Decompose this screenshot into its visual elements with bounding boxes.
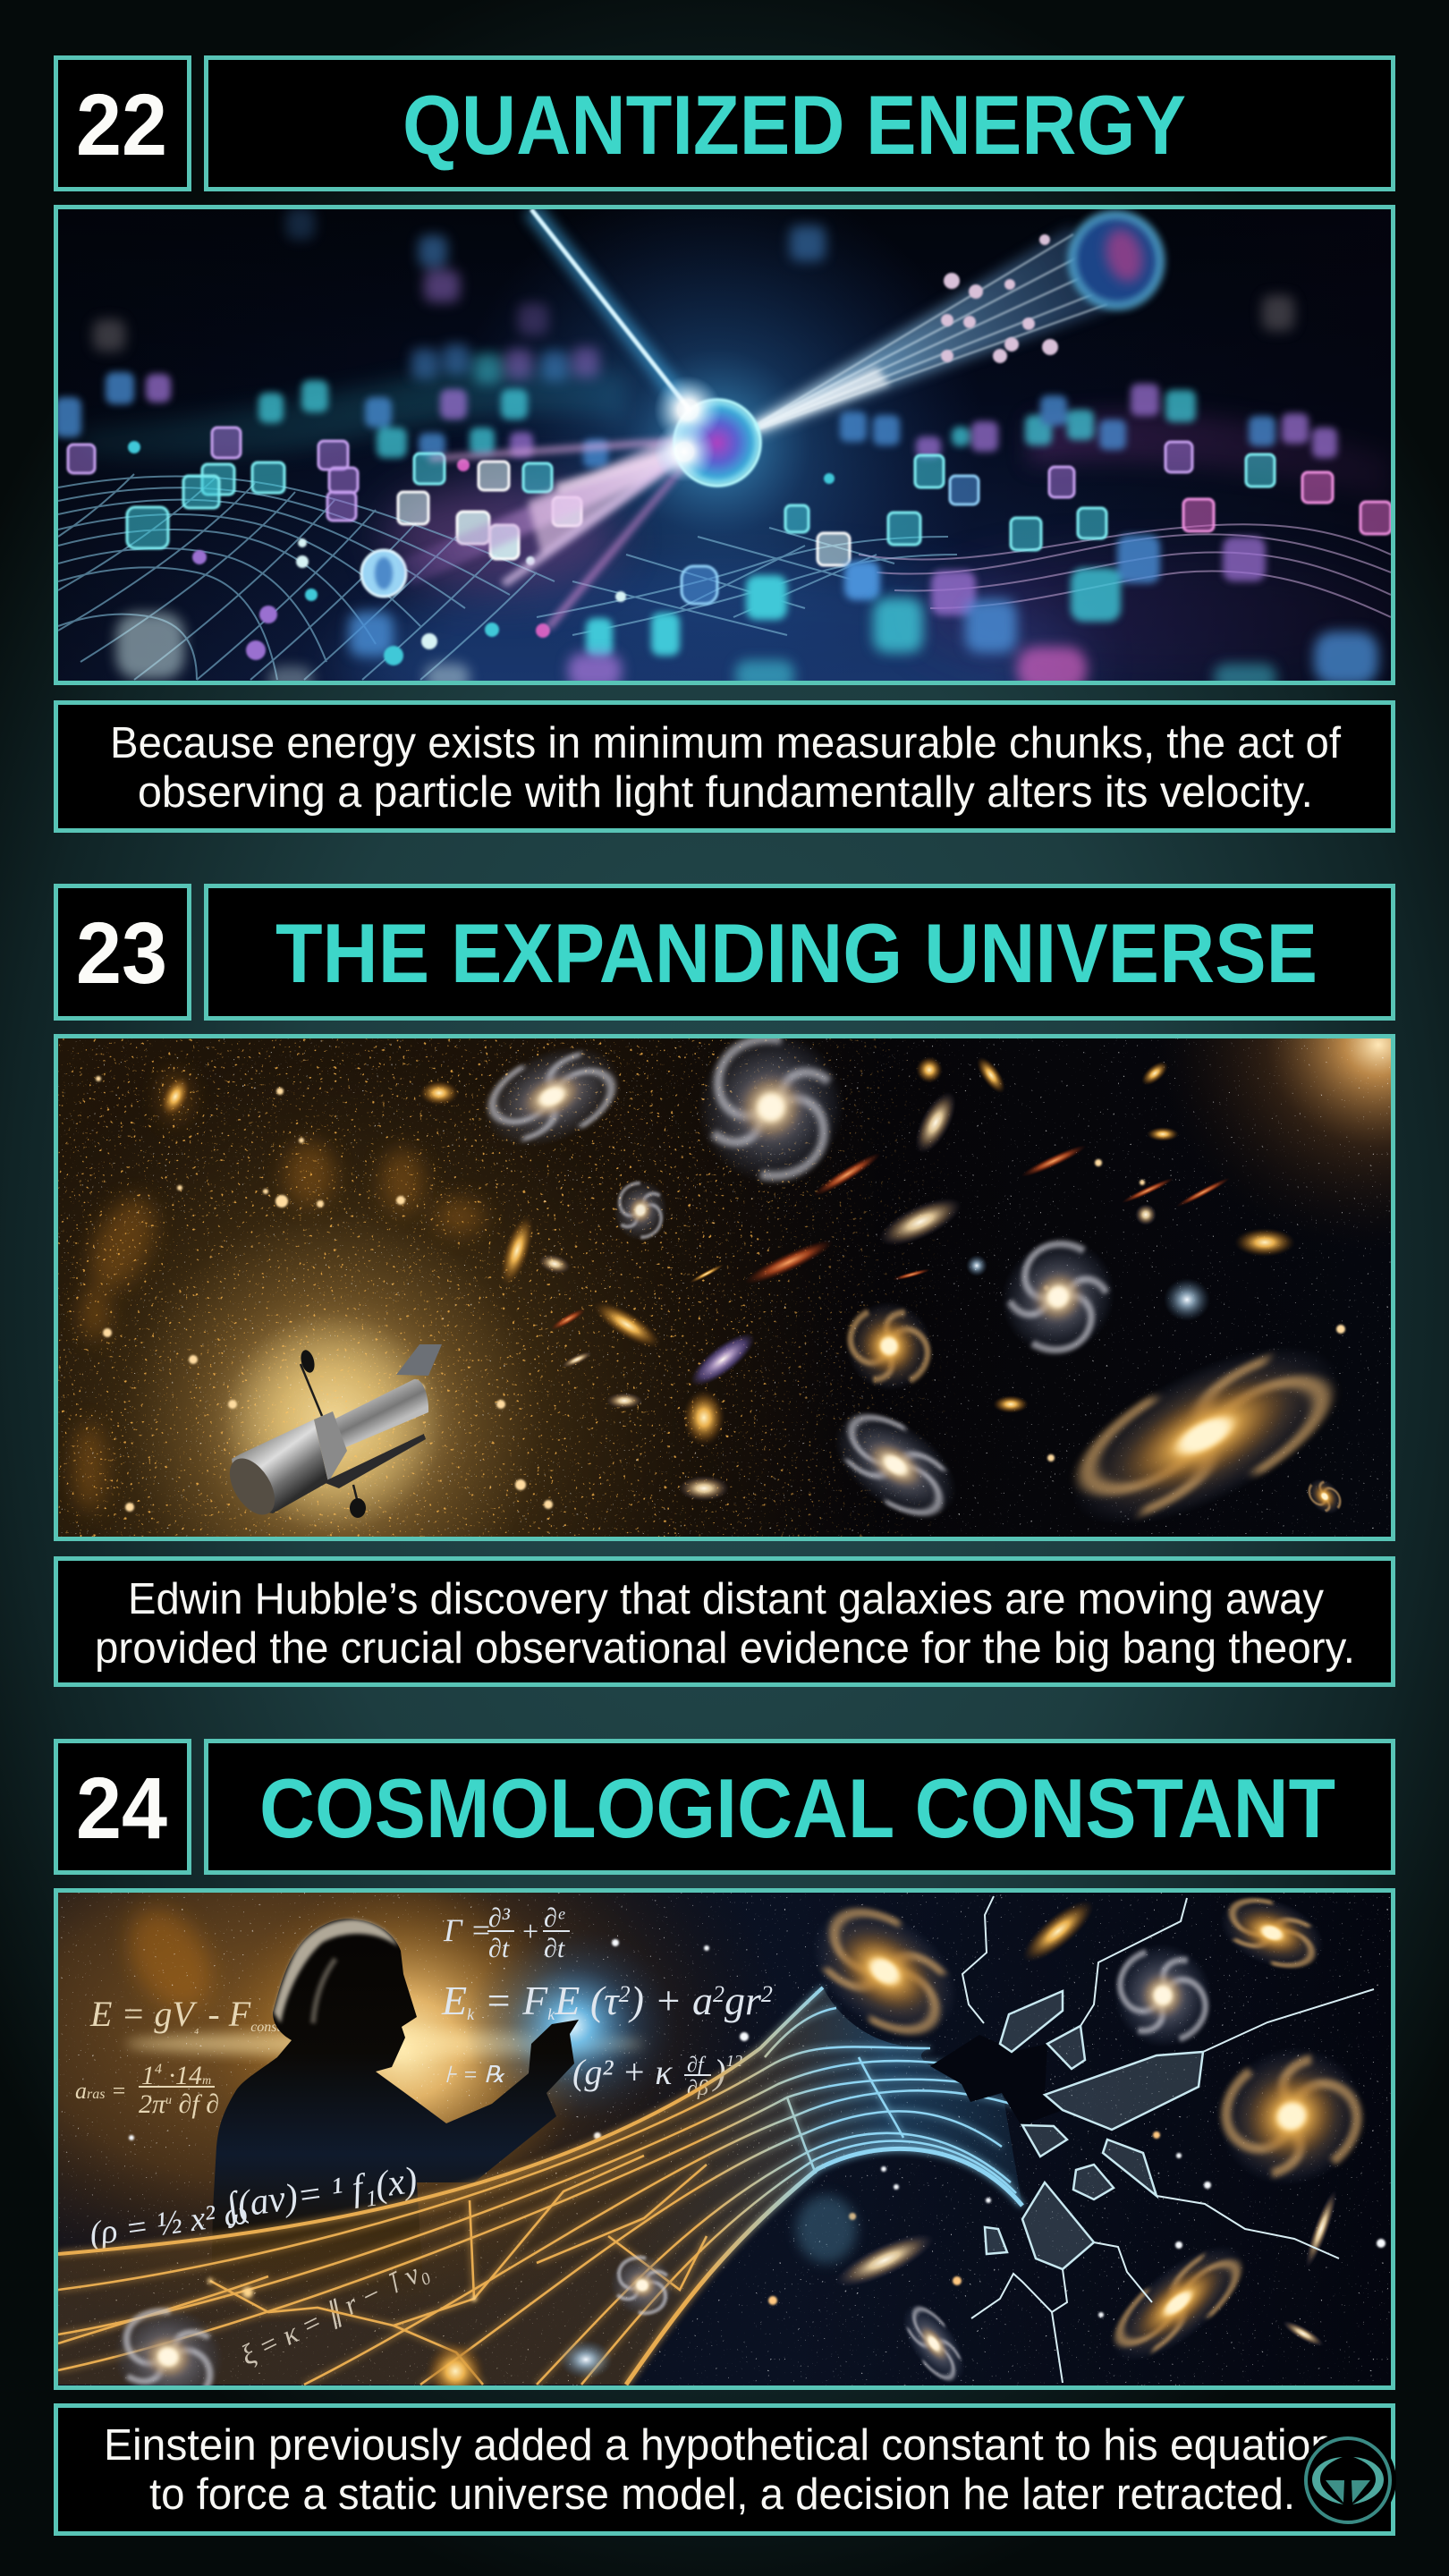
- distant particle disc: [1061, 204, 1172, 317]
- scattered outgoing beam: [750, 225, 1111, 434]
- cracks in spacetime: [962, 1896, 1374, 2383]
- equations on the right of the figure: ∂³: [488, 1903, 511, 1933]
- equations on the right of the figure: 12: [726, 2052, 742, 2070]
- equations on the right of the figure: gr: [724, 1978, 762, 2023]
- heading: cosmological constant: COSMOLOGICAL CONSTANT: [259, 1761, 1335, 1855]
- star field: [58, 1893, 1391, 2385]
- equations on the left of the figure: ₄: [194, 2020, 199, 2035]
- equations across the figure: ∫(av)= ¹ f₁(x): [222, 2160, 420, 2229]
- caption 23: provided the crucial observational evidence for the big bang theory.: [95, 1624, 1355, 1673]
- caption 22: Because energy exists in minimum measurable chunks, the act of: [110, 719, 1341, 767]
- broken fabric shards: [985, 1991, 1203, 2269]
- caption 23: Edwin Hubble’s discovery that distant galaxies are moving away: [128, 1575, 1324, 1623]
- equations on the left of the figure: 4: [155, 2062, 162, 2077]
- mid-distance blurred quanta: [55, 372, 1337, 468]
- equations on the left of the figure: 1: [141, 2061, 155, 2090]
- number box 23: [55, 886, 190, 1018]
- scattered galaxies: [788, 1881, 981, 2062]
- heading: the expanding universe: [206, 886, 1394, 1018]
- heading: quantized energy: QUANTIZED ENERGY: [402, 78, 1186, 172]
- equations on the left of the figure: const: [250, 2020, 282, 2035]
- caption 22: observing a particle with light fundamentally alters its velocity.: [138, 768, 1313, 817]
- equations on the right of the figure: Γ =: [443, 1912, 492, 1948]
- icon: hubble space telescope: [220, 1333, 442, 1522]
- bubble particle: [361, 550, 406, 597]
- caption 24: Einstein previously added a hypothetical constant to his equation: [104, 2421, 1335, 2470]
- scattered purple rays: [402, 429, 699, 630]
- number box 24: [55, 1741, 190, 1873]
- equations on the right of the figure: +: [521, 1915, 540, 1947]
- spiral galaxies: [468, 1026, 636, 1167]
- bright stars: [96, 1076, 1345, 1512]
- deep background blurred quanta: [93, 208, 1294, 384]
- equations on the right of the figure: k: [547, 2005, 555, 2023]
- small dots on floor: [128, 441, 835, 665]
- dark void of the broken fabric: [930, 2035, 1063, 2157]
- sharp quanta on the grid: [68, 428, 1391, 604]
- icon: circular logo badge: [1300, 2432, 1396, 2529]
- illustration: photon striking particle on quantum grid: [54, 205, 1395, 685]
- silhouette of einstein: [211, 1919, 579, 2299]
- equations on the right of the figure: ∂t: [544, 1934, 565, 1963]
- incoming photon beam: [531, 209, 689, 409]
- illustration: einstein silhouette and shattering spacetime: [55, 1878, 1394, 2419]
- foreground bokeh quanta: [586, 535, 1266, 657]
- equations on the right of the figure: E (τ: [554, 1978, 620, 2023]
- equations on the right of the figure: 2: [761, 1981, 773, 2007]
- spacetime fabric band: [58, 1987, 1022, 2385]
- equations on the left of the figure: ·14: [162, 2061, 202, 2090]
- equations on the right of the figure: ) + a: [628, 1978, 713, 2023]
- caption 24: [55, 2406, 1394, 2533]
- red streak galaxies: [548, 1141, 1232, 1333]
- equations on the right of the figure: E: [442, 1978, 467, 2023]
- glitter of gold stars: [58, 1038, 1391, 1537]
- white star field: [58, 1038, 1391, 1537]
- floor grid: [58, 474, 957, 680]
- equations on the right of the figure: ∂t: [488, 1934, 510, 1963]
- equations across the figure: ξ = κ = ∥ r − ⊺ ν₀: [235, 2253, 433, 2371]
- equations on the right of the figure: ∂ᵉ: [544, 1903, 565, 1933]
- target particle sphere: [674, 400, 760, 486]
- number box 23: 23: [76, 904, 167, 1002]
- section 24: cosmological constant: [55, 1741, 1396, 2533]
- bright stars: [129, 1939, 1385, 2318]
- illustration: hubble telescope and receding galaxies: [55, 839, 1449, 1562]
- equations on the right of the figure: ): [712, 2052, 725, 2092]
- caption 23: [55, 1558, 1394, 1685]
- number box 22: [55, 57, 190, 190]
- equations across the figure: [87, 2160, 433, 2371]
- equations on the left of the figure: aras =: [75, 2078, 127, 2104]
- equations on the right of the figure: ∂f: [687, 2054, 707, 2077]
- section 22: quantized energy: [55, 57, 1413, 830]
- equations on the right of the figure: 2: [713, 1981, 724, 2007]
- equations on the left of the figure: E = gV: [90, 1994, 194, 2034]
- equations on the right of the figure: ⊦ = ℞: [445, 2062, 505, 2088]
- heading: the expanding universe: THE EXPANDING UNIVERSE: [275, 906, 1318, 1000]
- section 23: the expanding universe: [55, 839, 1449, 1685]
- gold and blue spacetime grid: [58, 1987, 1022, 2385]
- caption 24: to force a static universe model, a decision he later retracted.: [149, 2470, 1295, 2519]
- equations on the left of the figure: ∂f ∂: [172, 2089, 219, 2119]
- equations on the left of the figure: [75, 1994, 282, 2119]
- equations on the right of the figure: 2: [619, 1981, 631, 2007]
- equations on the right of the figure: (g² + κ: [572, 2052, 673, 2092]
- equations on the right of the figure: [441, 1903, 773, 2100]
- equations on the left of the figure: u: [165, 2094, 172, 2107]
- number box 24: 24: [76, 1759, 167, 1857]
- equations on the left of the figure: 2π: [139, 2089, 165, 2119]
- heading: quantized energy: [206, 57, 1394, 190]
- caption 22: [55, 703, 1394, 830]
- elliptical galaxies: [155, 1053, 1295, 1501]
- equations on the left of the figure: m: [202, 2074, 211, 2088]
- equations on the left of the figure: - F: [199, 1994, 251, 2034]
- heading: cosmological constant: [206, 1741, 1394, 1873]
- number box 22: 22: [76, 76, 167, 174]
- gold nebula clouds: [73, 1072, 485, 1512]
- equations on the right of the figure: k: [467, 2005, 475, 2023]
- equations on the right of the figure: ∂β: [687, 2077, 708, 2100]
- equations across the figure: (ρ = ½ x² ω: [87, 2194, 250, 2253]
- equations on the right of the figure: = F: [474, 1978, 548, 2023]
